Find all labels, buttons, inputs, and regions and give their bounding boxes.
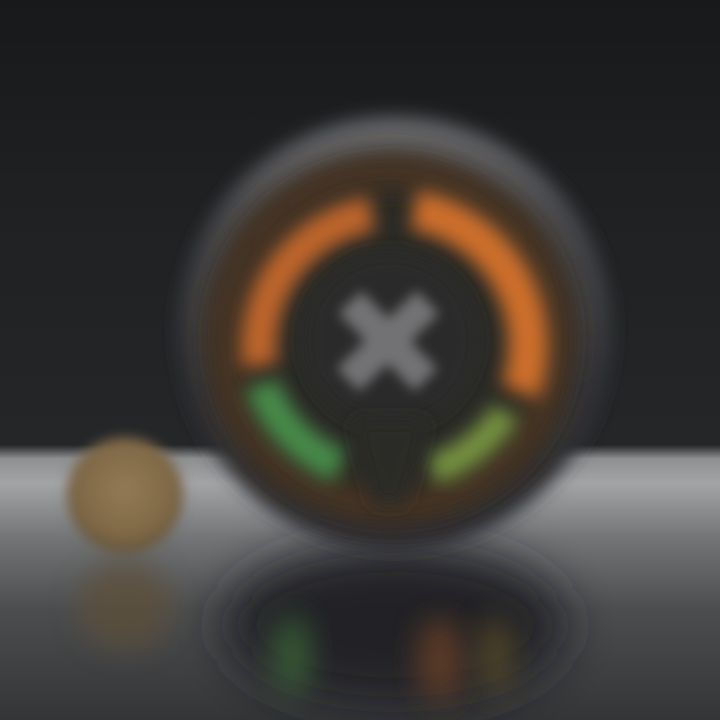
green reflection <box>272 615 312 695</box>
inner disc <box>210 158 574 522</box>
orange arc left <box>259 214 372 366</box>
green arc left <box>262 384 340 466</box>
gauge dial <box>179 117 611 549</box>
green arc right <box>432 412 506 470</box>
X emblem <box>348 302 428 380</box>
olive reflection <box>477 617 513 693</box>
dark floor area beneath dial <box>225 545 565 705</box>
reflective floor <box>0 445 720 720</box>
coin body <box>67 437 183 553</box>
orange reflection <box>416 618 464 702</box>
dial reflection <box>272 615 513 702</box>
brown halo ring <box>222 170 558 506</box>
outer rim <box>179 117 611 549</box>
coin <box>67 437 183 651</box>
lower pointer stem <box>352 420 428 505</box>
coin reflection <box>77 559 173 651</box>
orange arc right <box>414 210 528 392</box>
dark center <box>302 252 478 428</box>
